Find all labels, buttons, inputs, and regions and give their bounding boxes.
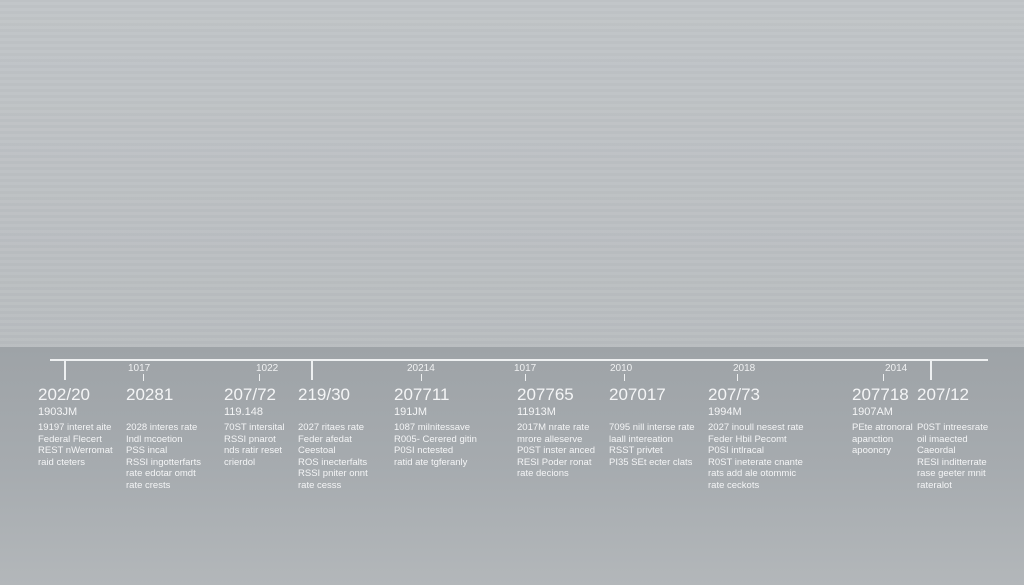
year label 2014: 2014 (885, 363, 907, 374)
entry 4: RSSI pniter onnt (298, 468, 368, 479)
entry 5: P0SI nctested (394, 445, 453, 456)
entry 4: rate cesss (298, 480, 341, 490)
entry 5: ratid ate tgferanly (394, 456, 467, 468)
entry 1: 202/20 (38, 385, 90, 404)
entry 3: crierdol (224, 456, 255, 468)
entry 6: 11913M (517, 406, 556, 418)
entry 2 (126, 385, 201, 490)
entry 8: 2027 inoull nesest rate (708, 422, 804, 433)
entry 3: RSSI pnarot (224, 434, 276, 444)
entry 6: mrore alleserve (517, 434, 582, 444)
entry 10: Caeordal (917, 445, 956, 456)
year label 20214: 20214 (407, 363, 435, 374)
entry 2: PSS incal (126, 445, 167, 456)
entry 5: 207711 (394, 385, 449, 404)
entry 10 (917, 385, 988, 490)
entry 7 (609, 385, 695, 468)
entry 3: 119.148 (224, 406, 263, 418)
entry 10: oil imaected (917, 434, 968, 444)
entry 3: nds ratir reset (224, 445, 282, 456)
entry 10: rase geeter mnit (917, 468, 986, 479)
entry 8: 207/73 (708, 385, 760, 404)
entry 9: apanction (852, 434, 893, 444)
year label 2018: 2018 (733, 363, 755, 374)
entry 7: laall intereation (609, 434, 673, 444)
entry 1: Federal Flecert (38, 434, 102, 444)
entry 9 (852, 385, 913, 456)
entry 6: RESI Poder ronat (517, 456, 591, 468)
entry 2: 2028 interes rate (126, 422, 197, 433)
entry 4 (298, 385, 368, 490)
entry 4: Feder afedat (298, 434, 352, 444)
entry 8: P0SI intlracal (708, 445, 764, 456)
timeline axis (50, 359, 988, 361)
entry 1: 19197 interet aite (38, 422, 111, 433)
entry 1: raid cteters (38, 456, 85, 468)
entry 7: RSST privtet (609, 445, 663, 456)
entry 3: 70ST intersital (224, 422, 285, 433)
entry 4: 219/30 (298, 385, 350, 404)
entry 4: 2027 ritaes rate (298, 422, 364, 433)
entry 6: rate decions (517, 468, 569, 479)
year label 1017: 1017 (128, 363, 150, 374)
entry 9: apooncry (852, 445, 891, 456)
entry 5: R005- Cerered gitin (394, 434, 477, 444)
entry 2: 20281 (126, 385, 173, 404)
entry 8: rats add ale otommic (708, 468, 796, 479)
entry 7: 7095 nill interse rate (609, 422, 695, 433)
entry 6: 2017M nrate rate (517, 422, 589, 433)
entry 10: rateralot (917, 480, 952, 490)
entry 6: P0ST inster anced (517, 445, 595, 456)
entry 2: RSSI ingotterfarts (126, 456, 201, 468)
entry 3 (224, 385, 285, 468)
entry 4: ROS inecterfalts (298, 456, 367, 468)
entry 6 (517, 385, 595, 479)
entry 1: 1903JM (38, 406, 77, 418)
entry 7: 207017 (609, 385, 666, 404)
entry 8: R0ST ineterate cnante (708, 456, 803, 468)
entry 8 (708, 385, 804, 490)
entry 2: rate edotar omdt (126, 468, 196, 479)
entry 9: 207718 (852, 385, 909, 404)
entry 6: 207765 (517, 385, 574, 404)
entry 5 (394, 385, 477, 468)
year label 2010: 2010 (610, 363, 632, 374)
entry 9: 1907AM (852, 406, 893, 418)
entry 3: 207/72 (224, 385, 276, 404)
year label 1022: 1022 (256, 363, 278, 374)
year label 1017b: 1017 (514, 363, 536, 374)
entry 2: rate crests (126, 480, 170, 490)
entry 8: 1994M (708, 406, 742, 418)
entry 5: 191JM (394, 406, 427, 418)
entry 8: Feder Hbil Pecomt (708, 434, 787, 444)
entry 8: rate ceckots (708, 480, 759, 490)
entry 5: 1087 milnitessave (394, 422, 470, 433)
entry 4: Ceestoal (298, 445, 336, 456)
entry 2: Indl mcoetion (126, 434, 183, 444)
entry 10: RESI inditterrate (917, 456, 987, 468)
entry 7: PI35 SEt ecter clats (609, 456, 692, 468)
entry 10: 207/12 (917, 385, 969, 404)
entry 9: PEte atronoral (852, 422, 913, 433)
entry 1 (38, 385, 113, 468)
entry 10: P0ST intreesrate (917, 422, 988, 433)
entry 1: REST nWerromat (38, 445, 113, 456)
